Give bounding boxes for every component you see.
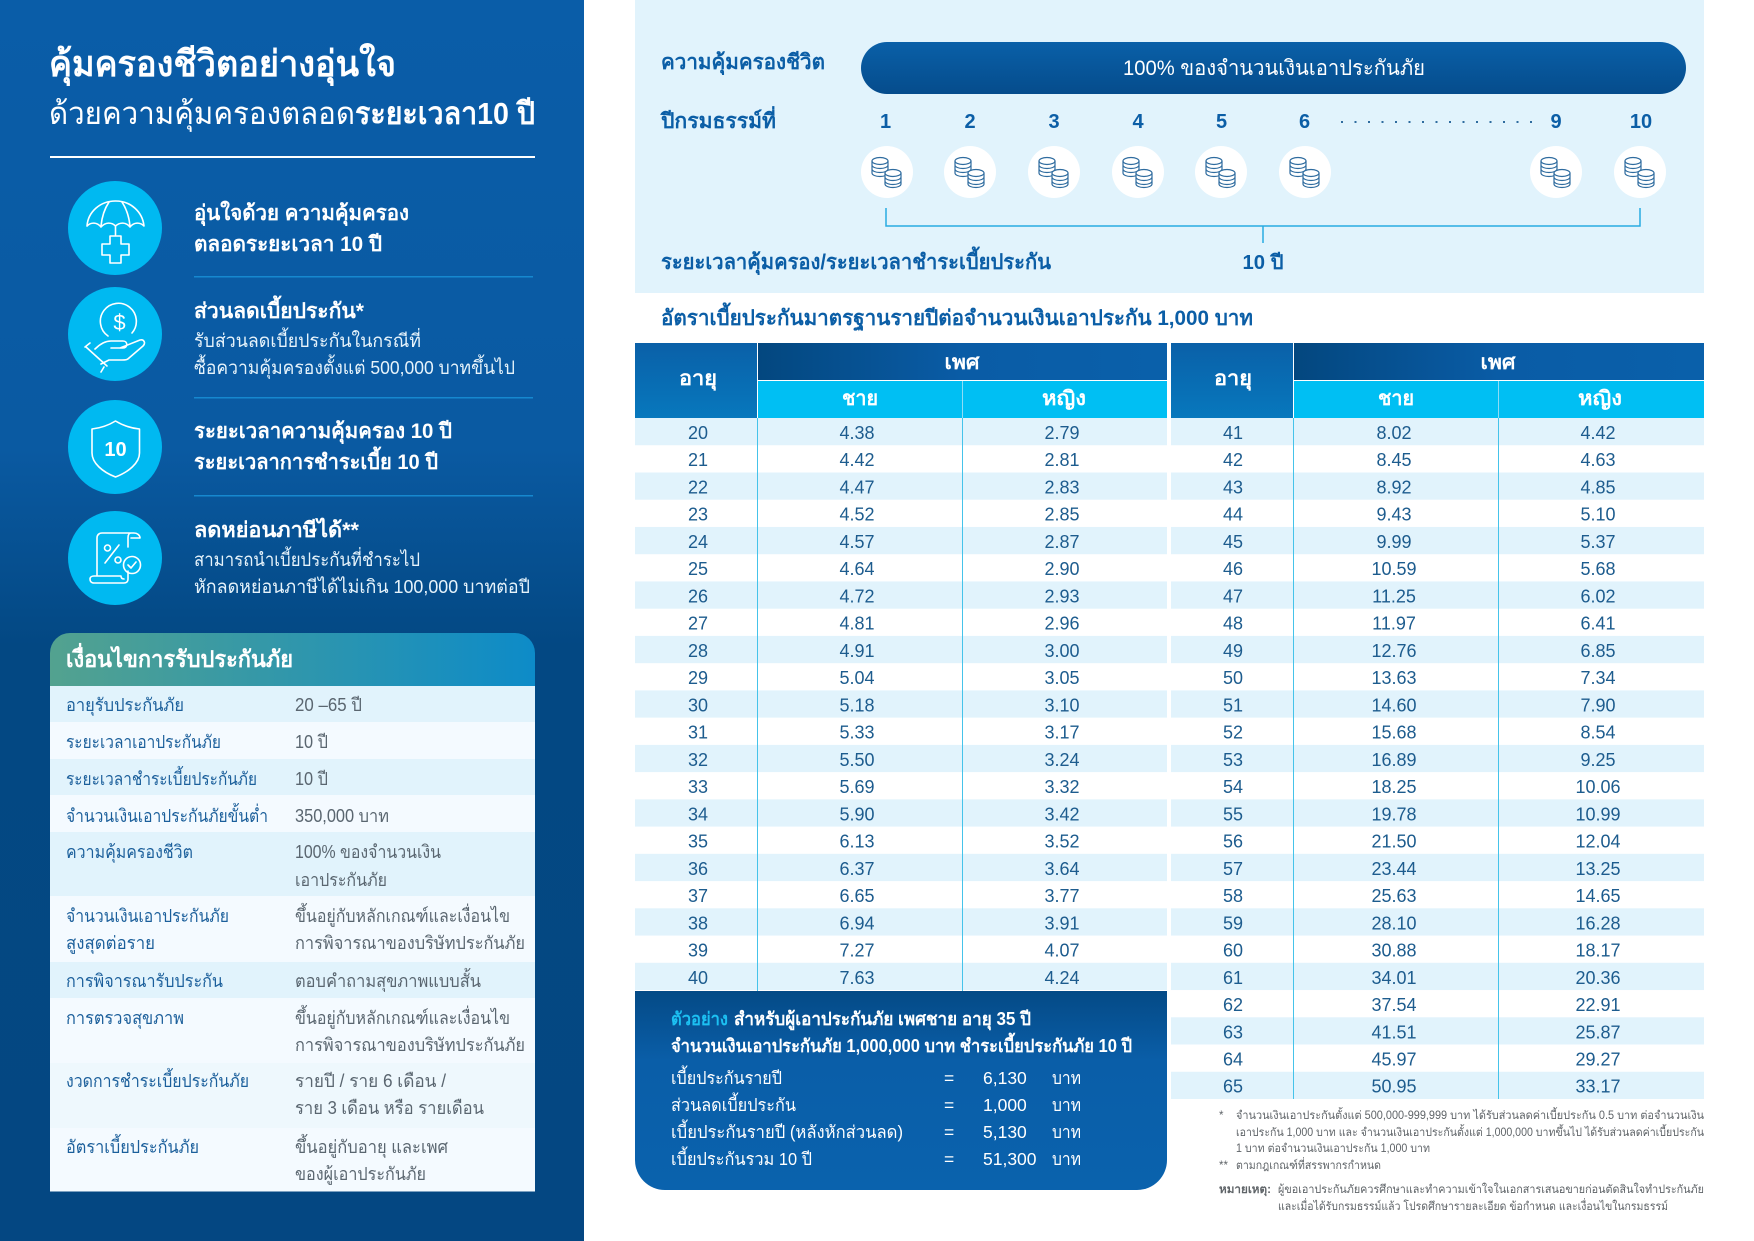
table rows right: 16.89	[1371, 750, 1417, 770]
footnotes: หมายเหตุ:	[1219, 1184, 1271, 1197]
table rows left: 6.94	[839, 913, 875, 933]
table rows left: 3.00	[1044, 641, 1080, 661]
heading: rate table: อัตราเบี้ยประกันมาตรฐานรายปีต่อจำนวนเงินเอาประกัน 1,000 บาท	[661, 302, 1253, 332]
table rows right: 30.88	[1371, 941, 1417, 961]
table rows right: 61	[1223, 968, 1243, 988]
footnotes: จำนวนเงินเอาประกันตั้งแต่ 500,000-999,999 บาท ได้รับส่วนลดค่าเบี้ยประกัน 0.5 บาท ต่อจำนวนเงิน	[1236, 1107, 1704, 1122]
table rows right: 33.17	[1575, 1076, 1621, 1096]
policy year numbers: 1	[880, 111, 891, 133]
table rows right: 51	[1223, 695, 1243, 715]
icon: shield with 10: 10	[104, 439, 127, 461]
table rows right: 42	[1223, 450, 1243, 470]
conditions labels: สูงสุดต่อราย	[66, 933, 155, 954]
title: ด้วยความคุ้มครองตลอด	[49, 96, 355, 133]
table rows right: 18.25	[1371, 777, 1417, 797]
table rows right: 56	[1223, 832, 1243, 852]
table rows right: 34.01	[1371, 968, 1417, 988]
panel: worked example	[635, 991, 1167, 1190]
text: coverage benefit: อุ่นใจด้วย ความคุ้มครอง	[194, 200, 409, 227]
example heading	[671, 1009, 1132, 1056]
table rows left: 28	[688, 641, 708, 661]
footnotes: **	[1219, 1160, 1228, 1172]
table rows left: 4.81	[839, 614, 875, 634]
table rows left: 7.63	[839, 968, 875, 988]
table header left: หญิง	[1042, 388, 1086, 410]
table header right: ชาย	[1378, 388, 1414, 410]
table: ages 41 to 65	[1171, 343, 1704, 1099]
table rows right: 6.02	[1580, 586, 1616, 606]
table rows right: 6.41	[1580, 614, 1616, 634]
policy year numbers: 4	[1132, 111, 1144, 133]
table rows left: 4.64	[839, 559, 875, 579]
footnotes	[1219, 1107, 1704, 1213]
icon: hand with coin	[68, 287, 162, 381]
table rows left: 6.37	[839, 859, 875, 879]
policy year numbers: 5	[1216, 111, 1227, 133]
policy year numbers: 3	[1048, 111, 1060, 133]
icon: hand with coin: $	[113, 310, 126, 335]
text: coverage and payment term: ระยะเวลาการชำระเบี้ย 10 ปี	[194, 446, 438, 474]
title	[49, 42, 535, 133]
conditions values: เอาประกันภัย	[295, 870, 387, 890]
policy year numbers: 9	[1550, 111, 1562, 133]
table rows right: 4.85	[1580, 478, 1616, 498]
policy year numbers: 2	[964, 111, 976, 133]
table rows left: 30	[688, 695, 708, 715]
table rows left: 21	[688, 450, 708, 470]
table rows right: 47	[1223, 586, 1243, 606]
table rows left: 32	[688, 750, 708, 770]
table rows right: 9.43	[1376, 505, 1412, 525]
table rows right: 25.63	[1371, 886, 1417, 906]
table rows left: 3.52	[1044, 832, 1080, 852]
table rows left: 38	[688, 913, 708, 933]
table rows left: 7.27	[839, 941, 875, 961]
table rows left: 4.24	[1044, 968, 1080, 988]
table rows right: 13.63	[1371, 668, 1417, 688]
text: tax deduction	[194, 517, 530, 597]
table rows left: 2.87	[1044, 532, 1080, 552]
table rows left	[635, 418, 1167, 991]
table rows right: 49	[1223, 641, 1243, 661]
table rows right: 15.68	[1371, 723, 1417, 743]
conditions values	[295, 695, 525, 1185]
table rows left: 36	[688, 859, 708, 879]
table rows left: 5.33	[839, 723, 875, 743]
table rows right: 14.60	[1371, 695, 1417, 715]
example calculation: บาท	[1052, 1095, 1081, 1115]
example calculation: =	[944, 1122, 954, 1142]
table rows left: 6.65	[839, 886, 875, 906]
table rows left: 4.72	[839, 586, 875, 606]
table rows left: 34	[688, 804, 708, 824]
table rows left: 5.18	[839, 695, 875, 715]
conditions values: ขึ้นอยู่กับหลักเกณฑ์และเงื่อนไข	[295, 903, 510, 927]
table rows left: 2.90	[1044, 559, 1080, 579]
table rows right: 10.99	[1575, 804, 1621, 824]
conditions labels: อัตราเบี้ยประกันภัย	[66, 1134, 199, 1157]
table rows right: 60	[1223, 941, 1243, 961]
table rows right: 48	[1223, 614, 1243, 634]
table header right: หญิง	[1578, 388, 1622, 410]
table rows right: 20.36	[1575, 968, 1621, 988]
conditions labels: ระยะเวลาชำระเบี้ยประกันภัย	[66, 766, 257, 789]
example calculation: 1,000	[983, 1095, 1027, 1115]
table rows left: 5.50	[839, 750, 875, 770]
table rows right: 8.02	[1376, 423, 1412, 443]
conditions values: การพิจารณาของบริษัทประกันภัย	[295, 1035, 525, 1055]
table rows right: 9.99	[1376, 532, 1412, 552]
panel: coverage timeline	[635, 0, 1704, 293]
conditions labels: ระยะเวลาเอาประกันภัย	[66, 732, 221, 752]
table rows left: 39	[688, 941, 708, 961]
conditions values: ของผู้เอาประกันภัย	[295, 1164, 426, 1185]
table rows right: 8.45	[1376, 450, 1412, 470]
table rows left: 3.17	[1044, 723, 1080, 743]
table rows right: 5.10	[1580, 505, 1616, 525]
table rows right: 54	[1223, 777, 1243, 797]
table rows left: 29	[688, 668, 708, 688]
table header left: ชาย	[842, 388, 878, 410]
table rows right: 23.44	[1371, 859, 1417, 879]
table rows left: 3.42	[1044, 804, 1080, 824]
title: คุ้มครองชีวิตอย่างอุ่นใจ	[49, 42, 396, 87]
conditions values: ขึ้นอยู่กับอายุ และเพศ	[295, 1134, 449, 1158]
table rows right: 11.25	[1372, 586, 1416, 606]
coin icons	[861, 146, 1666, 198]
example calculation: 6,130	[983, 1068, 1027, 1088]
table rows right: 10.59	[1371, 559, 1417, 579]
table rows right: 14.65	[1575, 886, 1621, 906]
table header right: เพศ	[1480, 352, 1517, 374]
icon: shield with 10	[68, 400, 162, 494]
table rows right: 9.25	[1580, 750, 1616, 770]
conditions labels: อายุรับประกันภัย	[66, 695, 184, 716]
table rows right: 62	[1223, 995, 1243, 1015]
footnotes: และเมื่อได้รับกรมธรรม์แล้ว โปรดศึกษารายละเอียด ข้อกำหนด และเงื่อนไขในกรมธรรม์	[1278, 1198, 1668, 1213]
table rows right: 46	[1223, 559, 1243, 579]
label: life coverage: ความคุ้มครองชีวิต	[661, 50, 825, 76]
table header left: เพศ	[944, 352, 981, 374]
table rows right: 6.85	[1580, 641, 1616, 661]
table rows left: 5.04	[839, 668, 875, 688]
table rows left: 5.69	[839, 777, 875, 797]
table: ages 20 to 40	[635, 343, 1167, 991]
table rows left: 35	[688, 832, 708, 852]
table rows left: 3.77	[1044, 886, 1080, 906]
table rows right: 10.06	[1575, 777, 1621, 797]
table rows left: 3.24	[1044, 750, 1080, 770]
panel: underwriting conditions	[50, 633, 535, 1192]
table rows left: 4.42	[839, 450, 875, 470]
conditions values: ราย 3 เดือน หรือ รายเดือน	[295, 1098, 484, 1118]
table rows right: 59	[1223, 913, 1243, 933]
table rows right: 12.04	[1575, 832, 1621, 852]
table rows left: 2.83	[1044, 478, 1080, 498]
example heading: ตัวอย่าง	[671, 1009, 728, 1029]
text: coverage and payment term: ระยะเวลาความคุ้มครอง 10 ปี	[194, 419, 452, 445]
conditions values: 100% ของจำนวนเงิน	[295, 842, 441, 862]
conditions values: รายปี / ราย 6 เดือน /	[295, 1071, 446, 1091]
conditions values: 350,000 บาท	[295, 806, 389, 826]
table rows left: 27	[688, 614, 708, 634]
table rows left: 33	[688, 777, 708, 797]
label: 10 years: 10 ปี	[1242, 251, 1284, 274]
table rows right: 16.28	[1575, 913, 1621, 933]
table rows right	[1171, 418, 1704, 1099]
conditions values: ขึ้นอยู่กับหลักเกณฑ์และเงื่อนไข	[295, 1005, 510, 1029]
bracket	[886, 208, 1640, 243]
label: coverage and payment term: ระยะเวลาคุ้มครอง/ระยะเวลาชำระเบี้ยประกัน	[661, 246, 1052, 276]
conditions labels: จำนวนเงินเอาประกันภัย	[66, 906, 229, 926]
text: premium discount	[194, 295, 515, 380]
title: ระยะเวลา10 ปี	[355, 96, 535, 131]
example calculation	[671, 1065, 1081, 1169]
table rows right: 41	[1223, 423, 1243, 443]
example calculation: เบี้ยประกันรายปี	[671, 1065, 782, 1088]
text: tax deduction: สามารถนำเบี้ยประกันที่ชำระไป	[194, 546, 420, 570]
example calculation: บาท	[1052, 1122, 1081, 1142]
table rows left: 3.64	[1044, 859, 1080, 879]
table rows left: 2.96	[1044, 614, 1080, 634]
text: premium discount: รับส่วนลดเบี้ยประกันในกรณีที่	[194, 327, 421, 351]
table rows right: 57	[1223, 859, 1243, 879]
table rows right: 5.68	[1580, 559, 1616, 579]
conditions labels: งวดการชำระเบี้ยประกันภัย	[66, 1068, 249, 1091]
footnotes: *	[1219, 1110, 1224, 1122]
example calculation: =	[944, 1068, 954, 1088]
table rows right: 29.27	[1575, 1050, 1621, 1070]
table rows left: 4.57	[839, 532, 875, 552]
table header right	[1171, 343, 1704, 418]
conditions values: 10 ปี	[295, 732, 328, 752]
table rows right: 64	[1223, 1050, 1243, 1070]
footnotes: ตามกฎเกณฑ์ที่สรรพากรกำหนด	[1236, 1157, 1381, 1172]
footnotes: 1 บาท ต่อจำนวนเงินเอาประกัน 1,000 บาท	[1236, 1142, 1430, 1155]
table rows right: 5.37	[1580, 532, 1616, 552]
table rows left: 24	[688, 532, 708, 552]
table rows right: 52	[1223, 723, 1243, 743]
table rows left: 4.91	[839, 641, 875, 661]
table rows right: 41.51	[1371, 1022, 1417, 1042]
text: coverage benefit: ตลอดระยะเวลา 10 ปี	[194, 232, 382, 256]
table rows right: 19.78	[1371, 804, 1417, 824]
table rows left: 23	[688, 505, 708, 525]
table rows left: 40	[688, 968, 708, 988]
table rows right: 4.42	[1580, 423, 1616, 443]
table rows right: 4.63	[1580, 450, 1616, 470]
table rows left: 26	[688, 586, 708, 606]
table rows right: 7.90	[1580, 695, 1616, 715]
example calculation: บาท	[1052, 1068, 1081, 1088]
policy year numbers	[880, 111, 1652, 133]
table rows right: 50	[1223, 668, 1243, 688]
example heading: สำหรับผู้เอาประกันภัย เพศชาย อายุ 35 ปี	[734, 1009, 1031, 1031]
table rows right: 8.92	[1376, 478, 1412, 498]
label: policy year: ปีกรมธรรม์ที่	[659, 105, 776, 133]
heading: conditions: เงื่อนไขการรับประกันภัย	[66, 642, 293, 672]
footnotes: ผู้ขอเอาประกันภัยควรศึกษาและทำความเข้าใจในเอกสารเสนอขายก่อนตัดสินใจทำประกันภัย	[1278, 1183, 1704, 1196]
table rows left: 31	[688, 723, 708, 743]
table rows left: 4.47	[839, 478, 875, 498]
table rows right: 12.76	[1371, 641, 1417, 661]
icon: tax scroll	[68, 511, 162, 605]
text: tax deduction: หักลดหย่อนภาษีได้ไม่เกิน 100,000 บาทต่อปี	[194, 576, 530, 597]
table rows right: 44	[1223, 505, 1243, 525]
text: premium discount: ส่วนลดเบี้ยประกัน*	[194, 295, 365, 323]
example calculation: เบี้ยประกันรายปี (หลังหักส่วนลด)	[671, 1119, 903, 1142]
example calculation: =	[944, 1149, 954, 1169]
icon: umbrella with cross	[68, 181, 162, 275]
table rows left: 2.79	[1044, 423, 1080, 443]
example calculation: 51,300	[983, 1149, 1037, 1169]
example calculation: =	[944, 1095, 954, 1115]
table rows right: 55	[1223, 804, 1243, 824]
table rows left: 3.10	[1044, 695, 1080, 715]
example calculation: เบี้ยประกันรวม 10 ปี	[671, 1146, 812, 1169]
table rows right: 43	[1223, 478, 1243, 498]
table rows right: 28.10	[1371, 913, 1417, 933]
text: premium discount: ซื้อความคุ้มครองตั้งแต่ 500,000 บาทขึ้นไป	[194, 354, 515, 380]
table rows left: 2.85	[1044, 505, 1080, 525]
panel: left blue sidebar	[0, 0, 584, 1241]
table rows left: 3.05	[1044, 668, 1080, 688]
table rows right: 8.54	[1580, 723, 1616, 743]
table rows right: 11.97	[1372, 614, 1416, 634]
table rows left: 4.07	[1044, 941, 1080, 961]
example calculation: 5,130	[983, 1122, 1027, 1142]
conditions values: การพิจารณาของบริษัทประกันภัย	[295, 933, 525, 953]
conditions values: 10 ปี	[295, 769, 328, 789]
conditions values: ตอบคำถามสุขภาพแบบสั้น	[295, 968, 481, 992]
conditions labels: การพิจารณารับประกัน	[66, 971, 223, 991]
table rows left: 25	[688, 559, 708, 579]
table rows right: 25.87	[1575, 1022, 1621, 1042]
text: tax deduction: ลดหย่อนภาษีได้**	[194, 517, 360, 542]
table rows right: 7.34	[1580, 668, 1616, 688]
table rows left: 3.32	[1044, 777, 1080, 797]
bar: coverage 100%: 100% ของจำนวนเงินเอาประกันภัย	[1123, 57, 1425, 80]
table rows left: 4.52	[839, 505, 875, 525]
conditions labels: การตรวจสุขภาพ	[66, 1008, 184, 1029]
policy year numbers: 6	[1299, 111, 1310, 133]
table rows right: 22.91	[1575, 995, 1621, 1015]
policy year numbers: 10	[1630, 111, 1652, 133]
table rows left: 22	[688, 478, 708, 498]
table rows right: 58	[1223, 886, 1243, 906]
table rows left: 4.38	[839, 423, 875, 443]
conditions labels: ความคุ้มครองชีวิต	[66, 842, 193, 863]
table rows left: 6.13	[839, 832, 875, 852]
text: coverage benefit	[194, 200, 409, 256]
table rows left: 5.90	[839, 804, 875, 824]
conditions labels: จำนวนเงินเอาประกันภัยขั้นต่ำ	[66, 803, 268, 826]
table rows right: 50.95	[1371, 1076, 1417, 1096]
conditions values: 20 –65 ปี	[295, 695, 362, 715]
table header left	[635, 343, 1167, 418]
table rows left: 2.81	[1044, 450, 1080, 470]
conditions labels	[66, 695, 268, 1157]
example calculation: ส่วนลดเบี้ยประกัน	[671, 1092, 796, 1115]
footnotes: เอาประกัน 1,000 บาท และ จำนวนเงินเอาประกันตั้งแต่ 1,000,000 บาทขึ้นไป ได้รับส่วนลดค่าเบี้ยประกัน	[1236, 1124, 1704, 1139]
table rows left: 3.91	[1044, 913, 1080, 933]
table rows right: 13.25	[1575, 859, 1621, 879]
table rows left: 20	[688, 423, 708, 443]
table rows right: 18.17	[1575, 941, 1621, 961]
example calculation: บาท	[1052, 1149, 1081, 1169]
bar: coverage 100%	[861, 42, 1686, 94]
text: coverage and payment term	[194, 419, 452, 474]
table rows right: 21.50	[1371, 832, 1417, 852]
table rows right: 45	[1223, 532, 1243, 552]
table rows left: 2.93	[1044, 586, 1080, 606]
table rows right: 65	[1223, 1076, 1243, 1096]
table header right: อายุ	[1214, 368, 1252, 391]
table header left: อายุ	[679, 368, 717, 391]
table rows right: 63	[1223, 1022, 1243, 1042]
table rows right: 37.54	[1371, 995, 1417, 1015]
table rows right: 53	[1223, 750, 1243, 770]
example heading: จำนวนเงินเอาประกันภัย 1,000,000 บาท ชำระเบี้ยประกันภัย 10 ปี	[671, 1032, 1132, 1056]
table rows right: 45.97	[1371, 1050, 1417, 1070]
table rows left: 37	[688, 886, 708, 906]
